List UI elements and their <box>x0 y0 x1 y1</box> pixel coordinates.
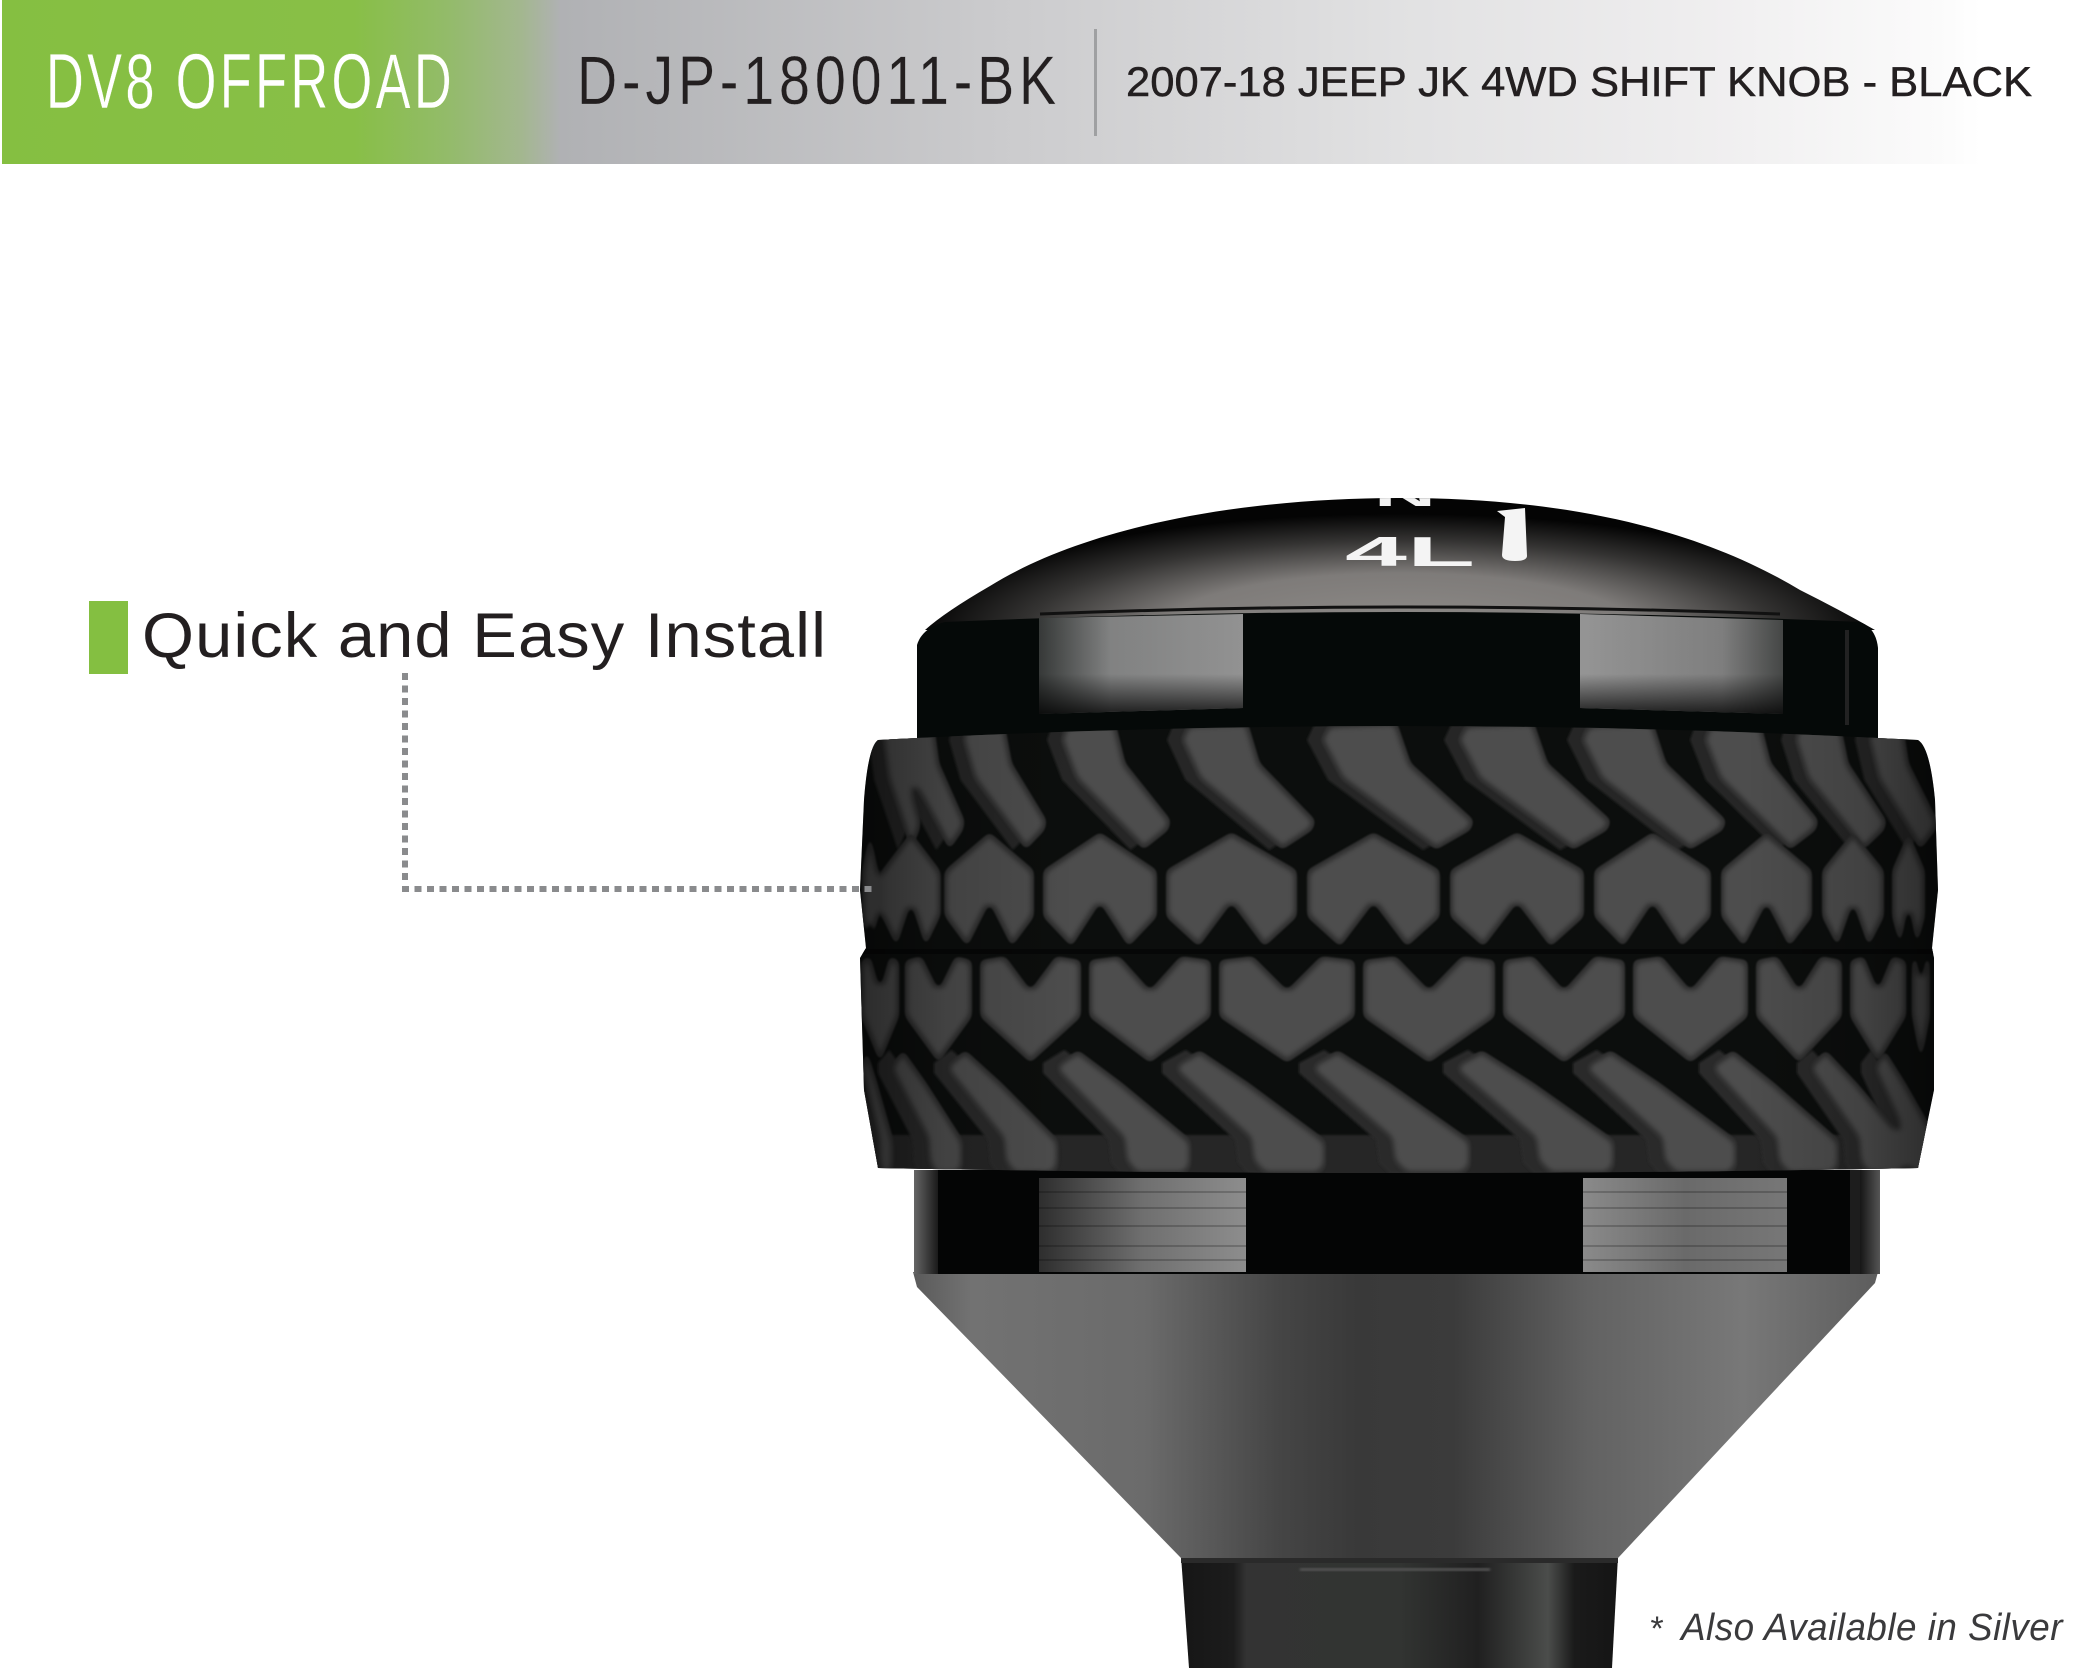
knob neck <box>1181 1555 1618 1668</box>
lower diagonal lugs <box>848 1050 1924 1174</box>
part number: D-JP-180011-BK <box>577 42 1061 119</box>
shift marking N: N <box>1374 480 1436 513</box>
shift gate bar <box>1497 508 1527 561</box>
dotted leader line <box>402 673 872 889</box>
upper band and dome <box>917 498 1878 738</box>
band ring <box>917 607 1878 750</box>
header band <box>2 0 2085 164</box>
dome cap <box>925 498 1875 630</box>
callout text: Quick and Easy Install <box>142 601 827 671</box>
callout: quick and easy install <box>89 601 872 889</box>
lower chevron lugs <box>861 956 1930 1063</box>
knob cone <box>913 1272 1878 1558</box>
green marker <box>89 601 128 674</box>
lower collar <box>914 1170 1880 1274</box>
tire tread ring <box>848 700 1945 1180</box>
upper diagonal lugs <box>869 722 1924 850</box>
header divider <box>1094 29 1097 136</box>
product title: 2007-18 JEEP JK 4WD SHIFT KNOB - BLACK <box>1126 58 2032 105</box>
lower recessed shelf <box>860 1135 1940 1175</box>
upper diagonal lug faces <box>882 722 1937 850</box>
upper chevron lugs <box>862 832 1925 947</box>
footnote: Also Available in Silver <box>1679 1607 2064 1649</box>
lower diagonal lug faces <box>862 1050 1938 1174</box>
footnote: * <box>1649 1610 1664 1648</box>
center groove <box>855 949 1945 954</box>
shift marking 4L: 4L <box>1345 528 1475 575</box>
product photo: shift knob <box>848 480 1945 1668</box>
brand name: DV8 OFFROAD <box>46 37 455 125</box>
